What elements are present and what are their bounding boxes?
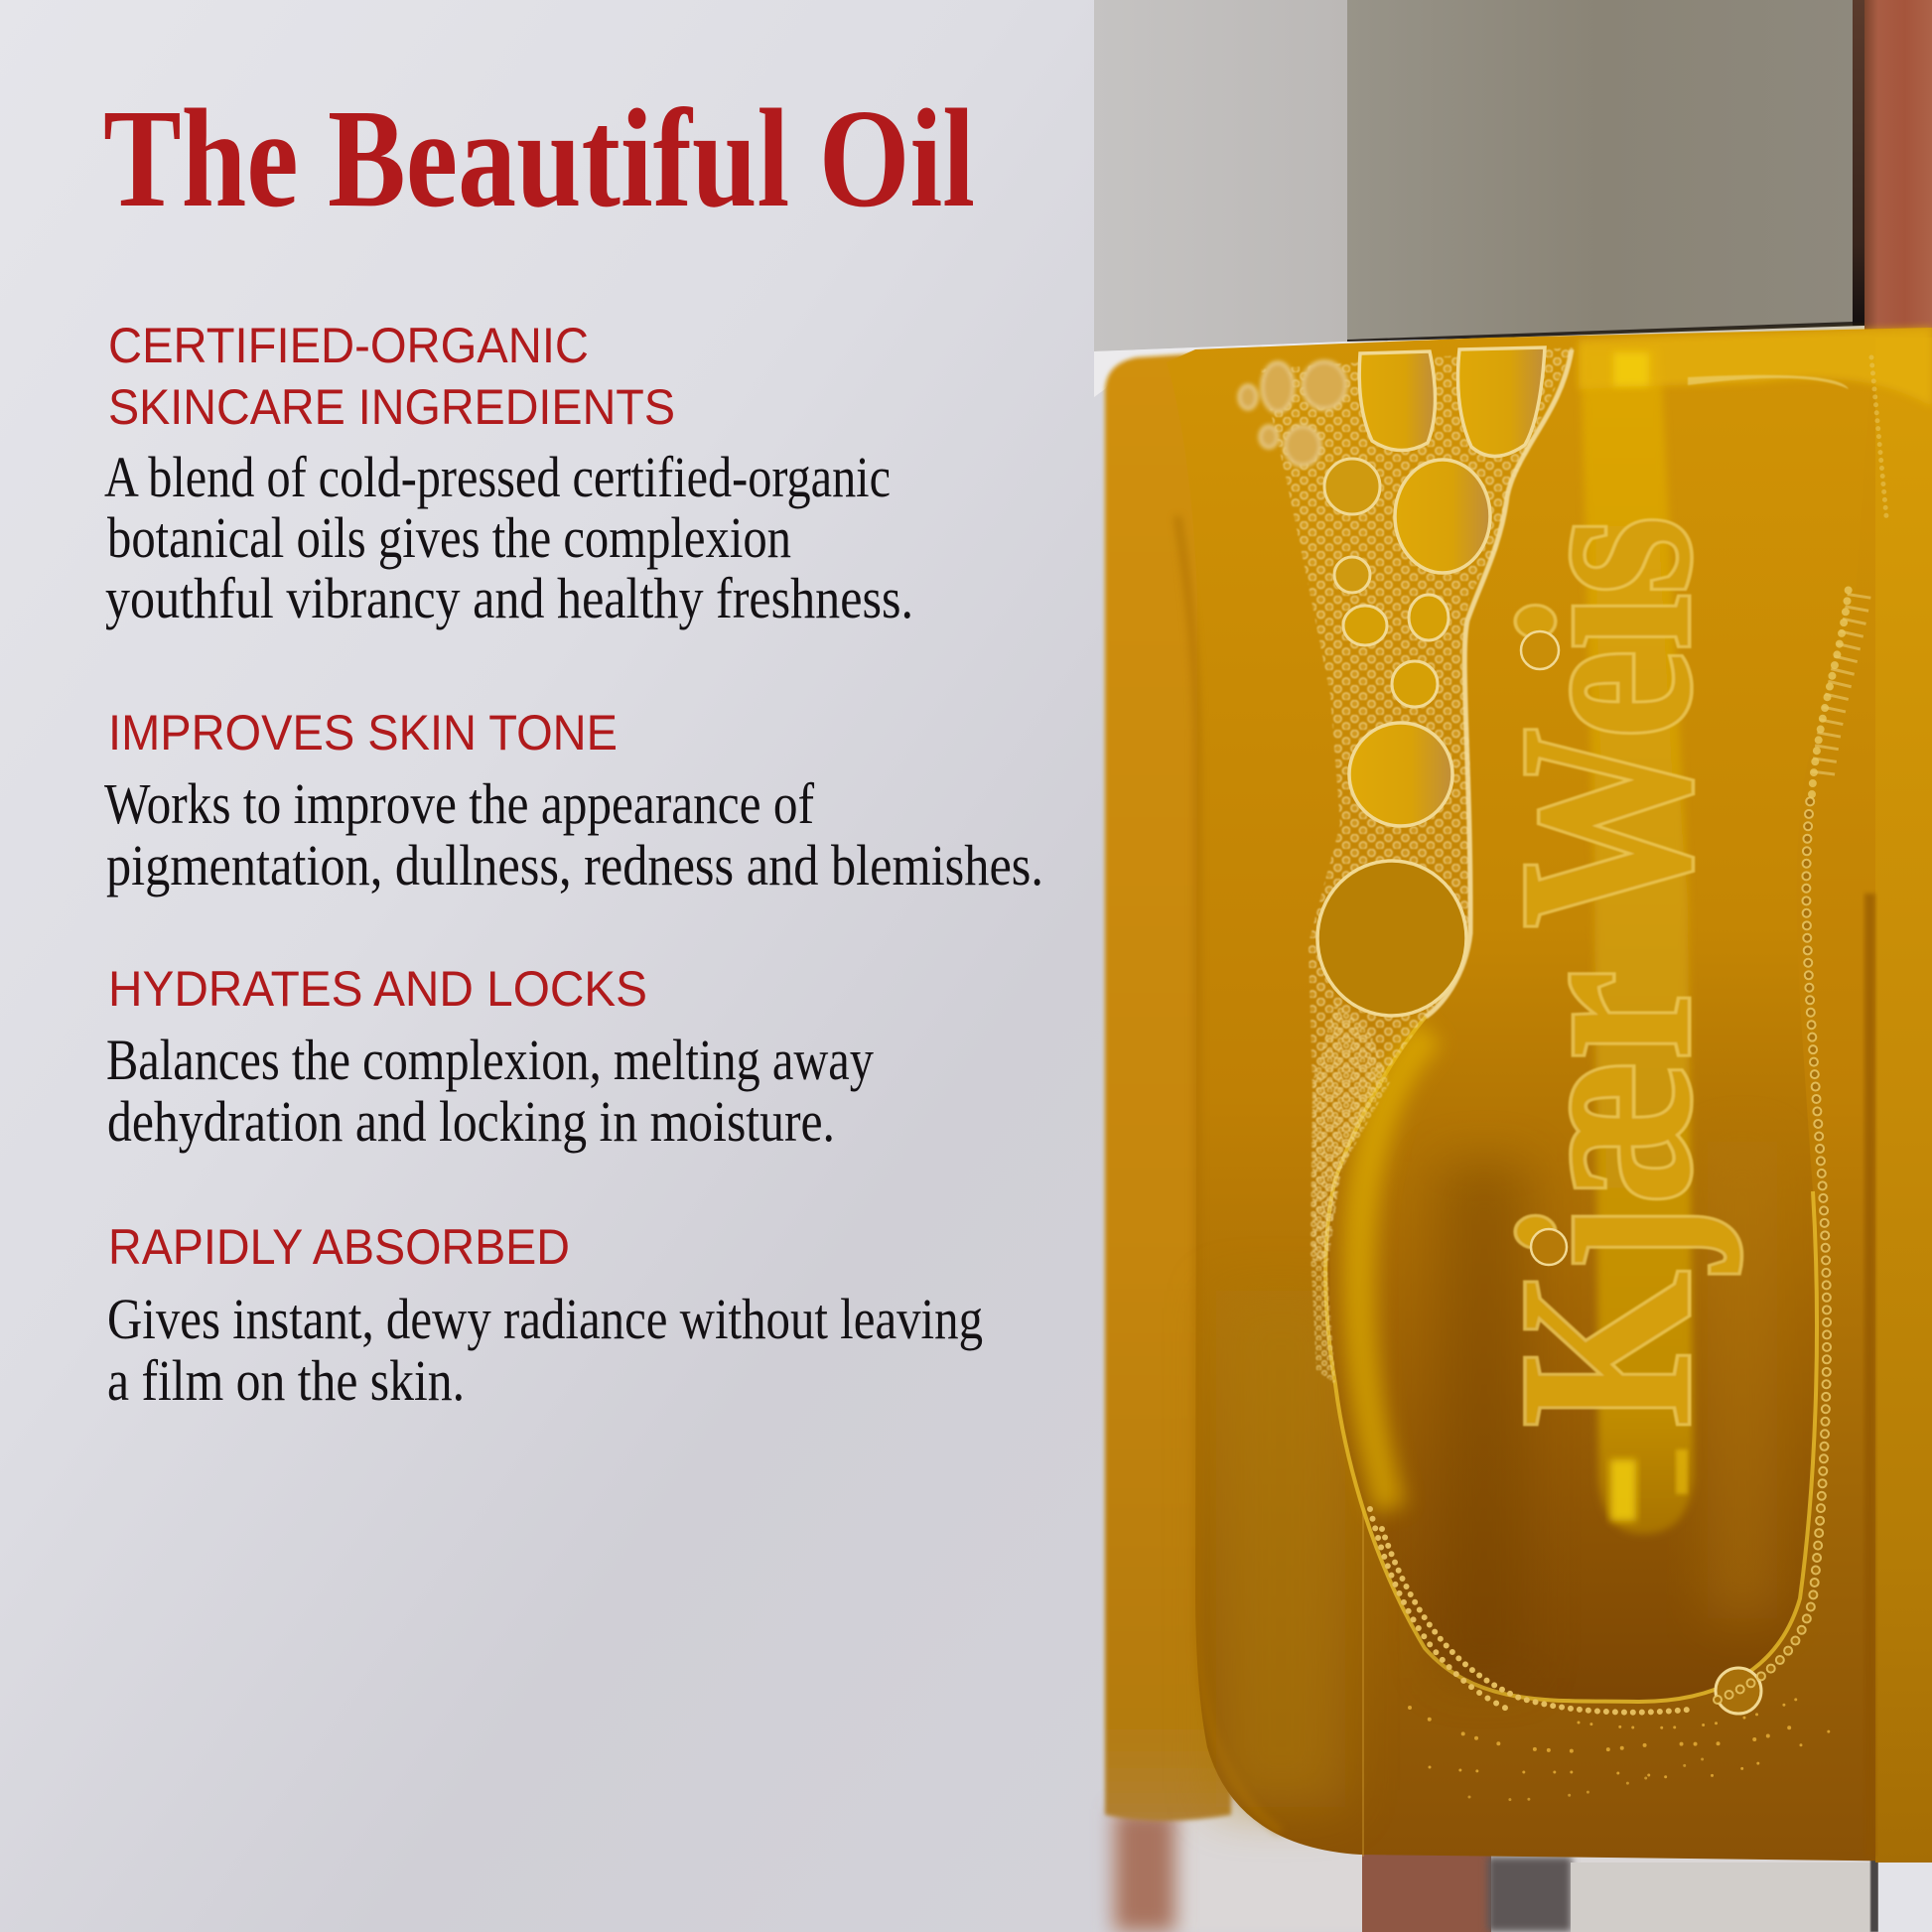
embossed logo text: Kjær Weis — [1468, 516, 1741, 1427]
heading: certified-organic — [108, 318, 675, 435]
body text: certified-organic — [104, 445, 913, 630]
left edge shade of the inner vial — [1177, 516, 1281, 1832]
top glass shine — [1579, 328, 1932, 407]
body text: absorbed: a film on the skin. — [107, 1348, 465, 1413]
heading: skin tone: IMPROVES SKIN TONE — [108, 705, 618, 760]
heading: hydrates: HYDRATES AND LOCKS — [108, 961, 647, 1017]
section: absorbed — [107, 1219, 983, 1413]
section: skin tone — [104, 705, 1043, 897]
body text: hydrates: Balances the complexion, melting away — [106, 1028, 874, 1092]
bottle cap — [1094, 0, 1932, 351]
body text: certified-organic: youthful vibrancy and healthy freshness. — [105, 566, 913, 630]
body text: hydrates — [106, 1028, 874, 1154]
bubbles — [1239, 347, 1761, 1714]
heading: certified-organic: SKINCARE INGREDIENTS — [108, 379, 675, 435]
white rim above the liquid — [1094, 336, 1588, 397]
title: The Beautiful Oil — [103, 79, 975, 236]
oil: outer left band — [1105, 351, 1231, 1821]
product photo: oil bottle — [1094, 0, 1932, 1932]
body text: absorbed — [107, 1287, 983, 1413]
body text: certified-organic: A blend of cold-pressed certified-organic — [104, 445, 891, 509]
foam chains, right and bottom — [1370, 357, 1886, 1800]
body text: absorbed: Gives instant, dewy radiance without leaving — [107, 1287, 983, 1351]
glass bottom strip — [1112, 1802, 1932, 1932]
dropper tube — [1581, 347, 1694, 1534]
body text: skin tone: pigmentation, dullness, redness and blemishes. — [106, 833, 1043, 897]
section: certified-organic — [104, 318, 913, 630]
heading: certified-organic: CERTIFIED-ORGANIC — [108, 318, 589, 373]
body text: hydrates: dehydration and locking in moisture. — [107, 1089, 835, 1154]
oil: main body — [1167, 328, 1932, 1862]
oil pocket with the logo — [1325, 362, 1871, 1702]
lower seam — [1362, 1142, 1364, 1857]
heading: absorbed: RAPIDLY ABSORBED — [108, 1219, 570, 1275]
body text: skin tone: Works to improve the appearance of — [104, 771, 815, 836]
lighter lower-left glow — [1216, 1291, 1345, 1807]
section: hydrates — [106, 961, 874, 1154]
body text: skin tone — [104, 771, 1043, 897]
right outer band — [1875, 338, 1932, 1863]
film edge of the foam — [1426, 349, 1572, 1017]
foam area, left — [1261, 347, 1574, 1384]
body text: certified-organic: botanical oils gives the complexion — [107, 505, 791, 570]
